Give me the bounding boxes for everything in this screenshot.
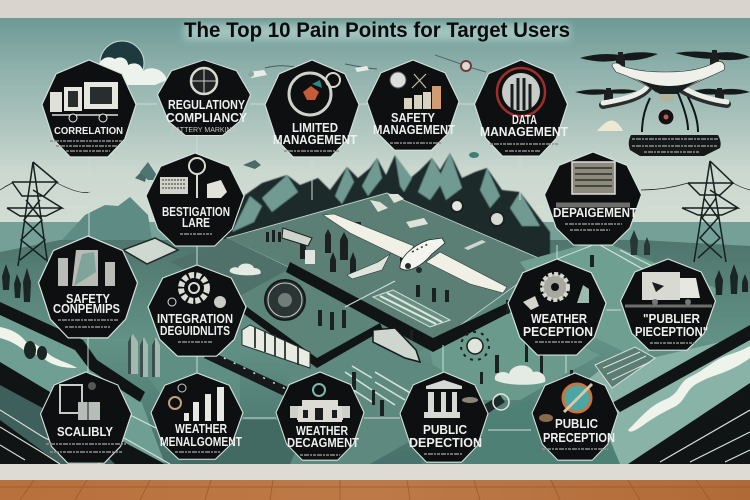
road [204, 350, 290, 396]
icon: gear and hand [523, 274, 589, 310]
panel: correlation [42, 60, 136, 157]
panel: bestigation lare: BESTIGATION [162, 205, 230, 219]
wall [0, 0, 750, 18]
panel: bestigation lare: LARE [182, 216, 210, 230]
icon: temple [424, 380, 478, 418]
ground objects on plateau [282, 194, 504, 264]
panel: weather decagment: WEATHER [296, 424, 348, 438]
icon: windows [60, 382, 100, 420]
panel: limited management: MANAGEMENT [273, 133, 357, 147]
panel: publier pieception: PIECEPTION" [635, 325, 708, 339]
panel: limited management [265, 60, 359, 157]
pylon left [0, 162, 90, 266]
panel: public preception: PUBLIC [555, 417, 598, 431]
sea horizon [0, 222, 750, 252]
panel: public preception: PRECEPTION [543, 431, 615, 445]
keyboard field [123, 238, 178, 264]
drone caption box [629, 135, 721, 156]
icon: data ring [497, 68, 545, 116]
panel: data management [474, 60, 568, 156]
small hill [597, 120, 623, 131]
people silhouettes [266, 222, 603, 416]
panel: scalibly [40, 372, 132, 463]
panel: weather peception: PECEPTION [523, 325, 593, 339]
river left [0, 327, 77, 368]
icon: prohibited sign [539, 384, 592, 422]
panel: safety conpemps: CONPEMIPS [53, 302, 120, 316]
ground sphere and small rings [461, 332, 509, 410]
tree silhouettes [2, 230, 748, 360]
drone body [612, 61, 725, 92]
panel: safety conpemps: SAFETY [66, 292, 111, 306]
icon: gauge [289, 73, 340, 115]
pylon right [641, 161, 750, 262]
panel: wealther menalgoment: MENALGOMENT [160, 435, 242, 449]
icon: building [290, 384, 350, 422]
drone legs [642, 93, 698, 132]
icon: truck [50, 82, 118, 122]
icon: delivery truck [625, 272, 712, 306]
panel: repairgement: DEPAIGEMENT [553, 206, 637, 220]
drone lower arms [603, 88, 727, 105]
icon: gear [168, 275, 226, 308]
icon: compass [191, 68, 217, 94]
striped field [595, 347, 655, 388]
ground target circle [265, 280, 305, 320]
panel: public preception [532, 373, 618, 460]
panel: safety conpemps [38, 236, 138, 338]
drone [575, 50, 750, 132]
central plateau field [227, 193, 548, 345]
panel: data management: DATA [512, 113, 537, 127]
moon and cloud [98, 41, 167, 85]
panel: integration deguidnlits: INTEGRATION [157, 312, 233, 326]
panel: integration deguidnlits: DEGUIDNLITS [160, 324, 230, 338]
panel: limited management: LIMITED [292, 121, 338, 135]
panel: regulatory compliancy: COMPLIANCY [166, 111, 248, 125]
mountains [222, 153, 550, 265]
river right [628, 346, 750, 432]
bottom left dark terrain lines [0, 410, 190, 464]
white container blocks [242, 325, 310, 368]
panel: weather decagment: DECAGMENT [287, 436, 359, 450]
drone motors [604, 50, 724, 104]
panel: regulatory compliancy: BATTERY MARKING [171, 127, 237, 134]
panel: repairgement [544, 152, 642, 245]
panel: publier pieception [620, 259, 716, 350]
panel: weather decagment [276, 372, 364, 460]
drone rotors [575, 52, 750, 95]
panel: wealther menalgoment [151, 373, 243, 459]
panel: public depection: PUBLIC [423, 423, 467, 437]
panel: data management: MANAGEMENT [480, 125, 568, 139]
small flying drones [135, 55, 486, 182]
title: The Top 10 Pain Points for Target Users [184, 18, 570, 42]
bottom right dark terrain lines [660, 410, 750, 462]
poster background sky [0, 18, 750, 223]
panel: regulatory compliancy [158, 60, 250, 135]
icon: screen [556, 162, 630, 205]
stone pillars [128, 334, 160, 377]
panel: publier pieception: "PUBLIER [643, 312, 700, 326]
panel: scalibly: SCALIBLY [57, 425, 114, 439]
panel: public depection [400, 372, 488, 462]
panel: public depection: DEPECTION [409, 436, 482, 450]
tent [373, 328, 420, 362]
panel: safety management: SAFETY [391, 111, 436, 125]
dark bands [0, 262, 750, 464]
panel: safety management: MANAGEMENT [373, 123, 455, 137]
panel: safety management [367, 60, 459, 150]
wooden floor [0, 480, 750, 500]
plane [323, 214, 507, 293]
crosswalk stripes [338, 245, 690, 405]
panel: bestigation lare [146, 153, 244, 246]
left mountains [62, 197, 152, 240]
ground clouds [230, 264, 545, 385]
ground plane [0, 240, 750, 464]
panel: correlation: CORRELATION [54, 126, 123, 137]
panel: regulatory compliancy: REGULATIONY [168, 98, 246, 112]
skirting board [0, 464, 750, 481]
mid tone stripes on bottom left terrain [0, 385, 115, 464]
icon: bar chart [169, 384, 224, 421]
icon: equipment [58, 250, 115, 286]
panel: weather peception [508, 259, 606, 355]
drone camera [658, 109, 674, 125]
panel: integration deguidnlits [148, 265, 246, 356]
panel: wealther menalgoment: WEATHER [175, 422, 227, 436]
icon: keyboard and magnifier [160, 158, 227, 198]
connector lines [88, 104, 621, 430]
title glow [184, 24, 570, 40]
panel: weather peception: WEATHER [531, 312, 587, 326]
icon: bars [390, 72, 441, 109]
lower tiles [0, 238, 750, 464]
